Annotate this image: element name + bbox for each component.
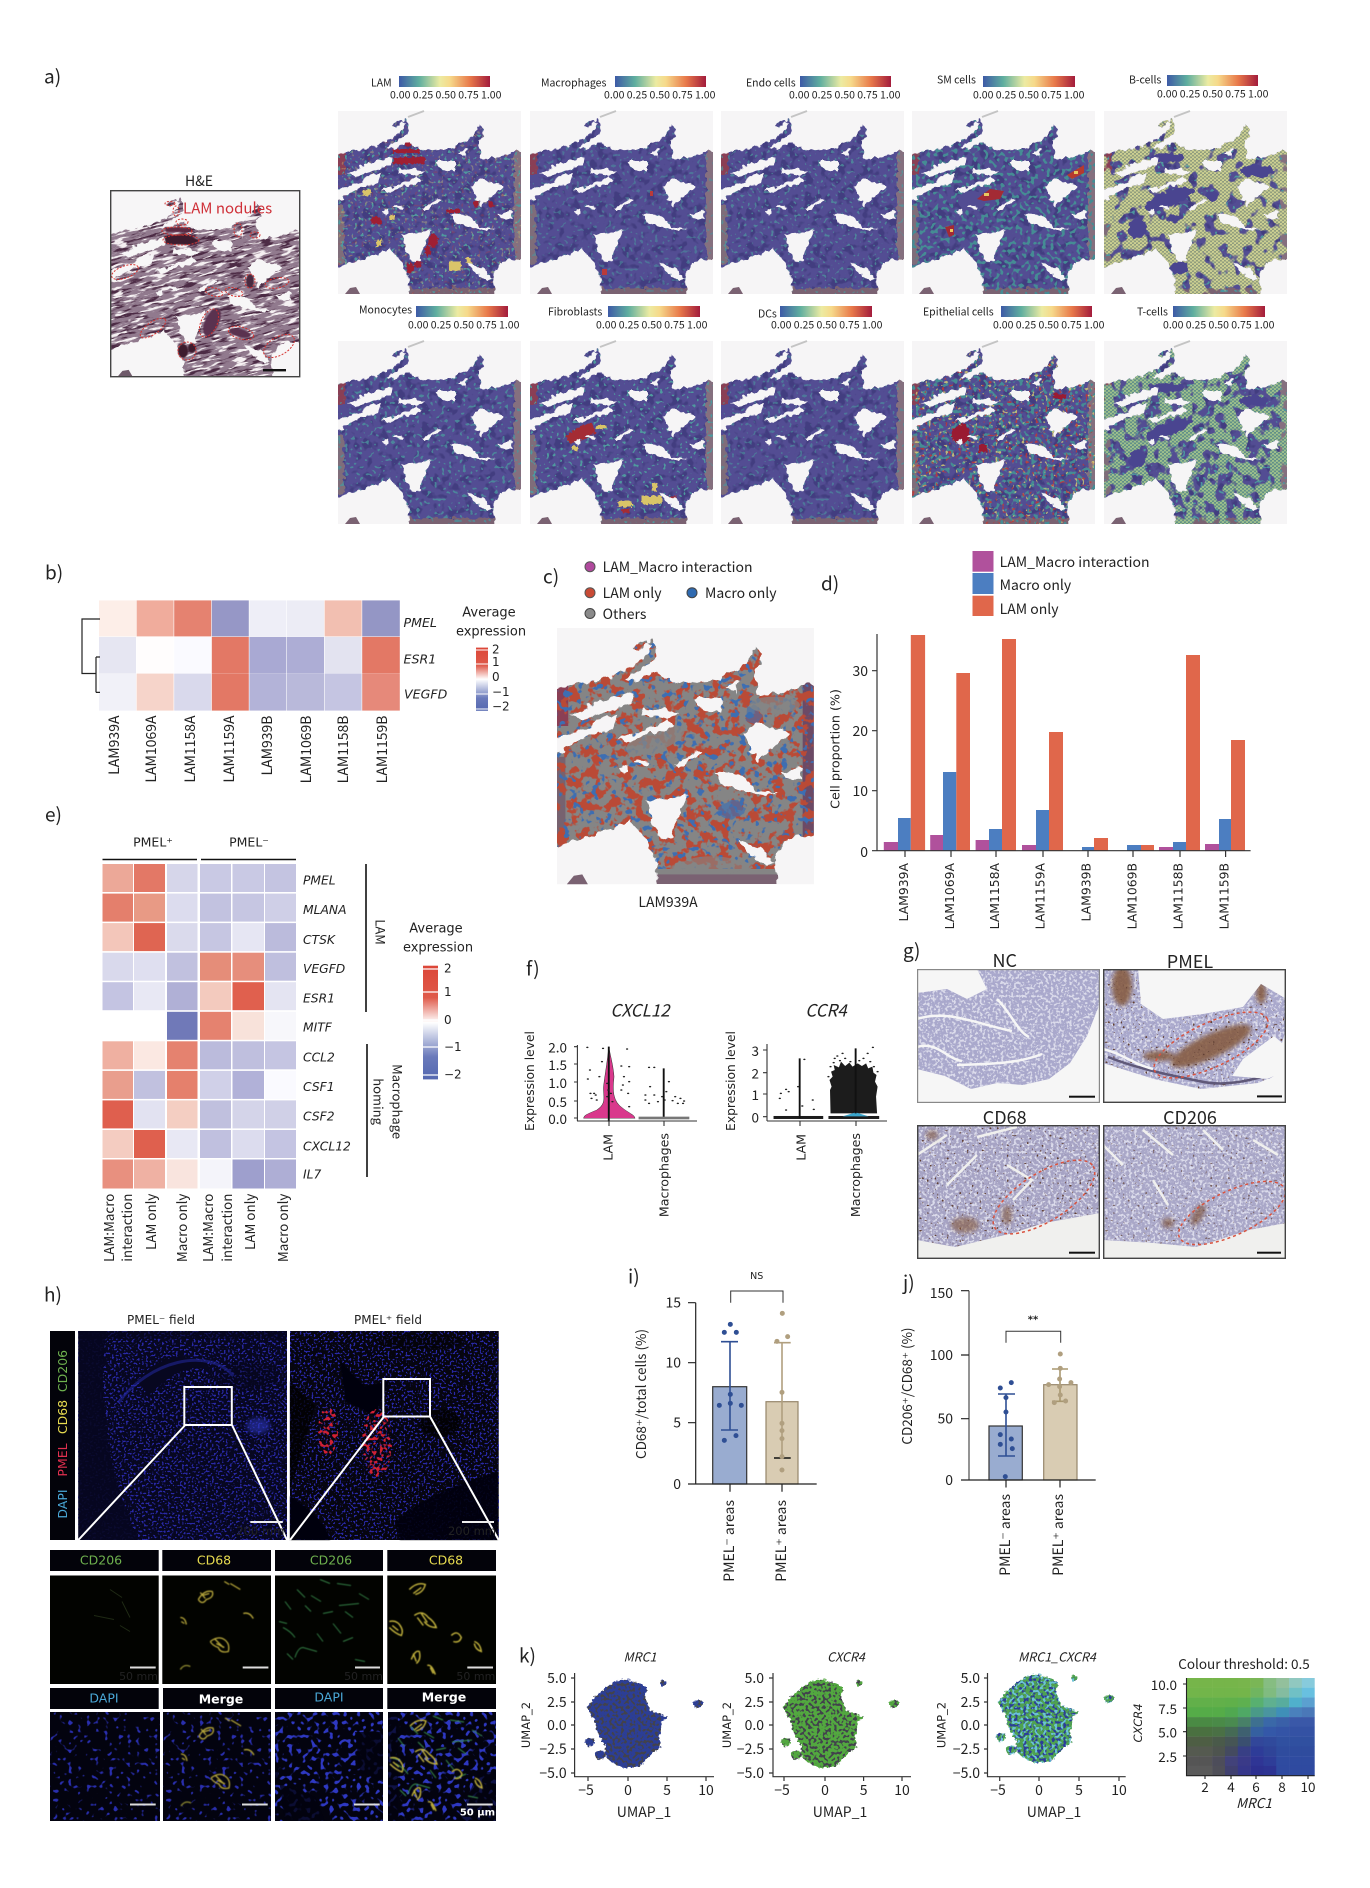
condition labels: Macro only (171, 1194, 191, 1262)
UMAP: MRC1_CXCR4: −2.5 (953, 1739, 980, 1759)
tick labels i: 0 (673, 1474, 681, 1494)
legend: average expression: −1 (492, 685, 510, 699)
panel e: heatmap (45, 800, 473, 1262)
UMAP: MRC1_CXCR4: 2.5 (961, 1692, 980, 1712)
UMAP: MRC1_CXCR4: 5.0 (961, 1668, 980, 1688)
channel key strip: PMEL (55, 1443, 70, 1477)
sample labels: LAM939B (257, 716, 277, 776)
panel d: grouped bar chart (821, 551, 1251, 929)
axis ticks j (961, 1291, 1096, 1488)
gene labels: CTSK (303, 933, 336, 947)
map: SM cells (908, 72, 1100, 298)
colour threshold legend: Colour threshold: 0.5 (1178, 1653, 1310, 1673)
map: B-cells: B-cells (1129, 72, 1161, 88)
map: Endo cells: Endo cells (746, 76, 796, 90)
panel h: immunofluorescence (44, 1280, 499, 1821)
map: LAM: LAM (371, 76, 392, 90)
legend: average expression: −2 (444, 1068, 462, 1082)
sample labels d: LAM1069A (942, 862, 957, 929)
map: Monocytes: Monocytes (359, 302, 412, 318)
row 1 channel headers: CD68 (197, 1552, 231, 1568)
colour threshold legend: 4 (1227, 1776, 1235, 1796)
plot titles: CCR4 (805, 996, 848, 1022)
UMAP: MRC1_CXCR4: UMAP_2 (934, 1702, 948, 1748)
row 2 channel headers: Merge (422, 1690, 466, 1704)
x labels i: PMEL⁺ areas (771, 1500, 791, 1582)
legend: average expression: 2 (492, 642, 500, 656)
plot titles (610, 996, 848, 1022)
axes i (688, 1303, 817, 1492)
UMAP: MRC1: −2.5 (539, 1739, 567, 1759)
gene labels: CSF2 (303, 1110, 335, 1124)
UMAP: MRC1: MRC1 (623, 1646, 657, 1666)
map: B-cells: 0.00 0.25 0.50 0.75 1.00 (1157, 86, 1269, 102)
channel key strip: CD206 (55, 1350, 70, 1392)
y ticks d: 20 (852, 721, 868, 741)
sample labels: LAM1069B (296, 716, 316, 783)
gene labels: ESR1 (404, 652, 436, 666)
violin: CXCL12 (523, 1031, 697, 1217)
UMAP: MRC1: 5.0 (547, 1668, 567, 1688)
significance bracket: ** (1028, 1314, 1039, 1326)
UMAP: MRC1: 0 (624, 1780, 632, 1800)
merge image, PMEL- (163, 1712, 271, 1821)
UMAP: MRC1_CXCR4: UMAP_1 (1027, 1802, 1081, 1822)
UMAP: MRC1 (519, 1646, 714, 1822)
gene group brackets: homing (370, 1078, 388, 1126)
legend: average expression: 1 (492, 655, 500, 669)
panel letter k: k) (519, 1642, 536, 1668)
UMAP: MRC1: 10 (698, 1780, 714, 1800)
map: Monocytes (334, 302, 526, 528)
DAPI image, PMEL+ (275, 1712, 383, 1821)
legend: average expression: −1 (444, 1040, 462, 1054)
gene labels: PMEL (303, 874, 336, 888)
legend: average expression: 0 (444, 1013, 452, 1027)
panel j: bar chart (896, 1268, 1096, 1576)
field titles (127, 1313, 422, 1327)
UMAP: MRC1: 5 (663, 1780, 671, 1800)
significance bracket NS (731, 1271, 783, 1303)
row 1 channel headers (50, 1550, 496, 1571)
IHC: CD68 (917, 1104, 1106, 1259)
bars (884, 635, 1245, 851)
legend c: LAM only (603, 583, 662, 603)
IHC: CD206: CD206 (1163, 1104, 1217, 1130)
map: Epithelial cells: Epithelial cells (923, 304, 994, 320)
tick labels j (930, 1283, 953, 1490)
sample caption: LAM939A (638, 892, 698, 912)
map: DCs (717, 306, 909, 528)
colour threshold legend: 2.5 (1158, 1746, 1177, 1766)
y title j: CD206⁺/CD68⁺ (%) (896, 1327, 916, 1445)
panel i: bar chart (628, 1262, 817, 1582)
gene labels: VEGFD (404, 686, 448, 702)
sample labels: LAM1159A (219, 715, 239, 783)
axes j (968, 1291, 970, 1480)
x labels i (719, 1500, 791, 1582)
channel key strip (50, 1331, 75, 1540)
significance bracket NS: NS (750, 1271, 763, 1282)
tick labels i (665, 1293, 681, 1494)
UMAP: MRC1_CXCR4 (934, 1646, 1127, 1822)
condition labels: Macro only (272, 1194, 292, 1262)
colour threshold legend: 8 (1278, 1776, 1286, 1796)
axes d (872, 634, 1251, 857)
sample labels: LAM1158A (180, 715, 200, 783)
gene labels: VEGFD (303, 962, 345, 976)
y ticks d (852, 661, 868, 862)
map: Fibroblasts: 0.00 0.25 0.50 0.75 1.00 (596, 318, 708, 332)
x labels j: PMEL⁻ areas (995, 1494, 1015, 1576)
map: Endo cells (717, 76, 909, 298)
y axis title d: Cell proportion (%) (828, 689, 842, 809)
UMAP: MRC1_CXCR4: −5 (990, 1780, 1006, 1800)
legend c (585, 557, 777, 624)
legend: average expression: Average (409, 922, 463, 936)
map: Macrophages: Macrophages (541, 76, 606, 90)
tick labels j: 100 (930, 1345, 953, 1365)
bars and dots j (989, 1354, 1077, 1480)
UMAP: MRC1: UMAP_1 (617, 1802, 671, 1822)
UMAP: CXCR4: −5 (774, 1780, 790, 1800)
group headers: PMEL⁻ (229, 834, 269, 850)
x labels j: PMEL⁺ areas (1048, 1494, 1068, 1576)
condition labels: LAM only (140, 1194, 160, 1250)
H&E image with LAM nodules: H&E (185, 171, 213, 191)
legend: average expression: expression (403, 940, 473, 956)
CD68 image, PMEL+: 50 mm (456, 1670, 495, 1683)
gene labels: CSF1 (303, 1080, 335, 1094)
H&E image with LAM nodules: LAM nodules (183, 198, 272, 218)
sample labels d: LAM1158B (1170, 863, 1186, 929)
colour threshold legend: 7.5 (1158, 1698, 1177, 1718)
map: T-cells: T-cells (1137, 304, 1168, 320)
sample labels d: LAM1069B (1124, 863, 1140, 929)
violin: CCR4: Macrophages (848, 1133, 863, 1217)
H&E image with LAM nodules (110, 176, 300, 378)
colour threshold legend: 5.0 (1158, 1722, 1177, 1742)
IHC: PMEL: PMEL (1167, 948, 1213, 974)
UMAP: CXCR4: −2.5 (737, 1739, 764, 1759)
panel letter j: j) (902, 1268, 915, 1296)
map: SM cells: SM cells (937, 72, 976, 88)
gene group brackets: LAM (372, 919, 390, 945)
group headers (102, 834, 296, 860)
IHC: CD68: CD68 (983, 1104, 1027, 1130)
plot titles: CXCL12 (610, 996, 671, 1022)
tick labels j: 50 (937, 1409, 953, 1429)
panel letter c: c) (543, 562, 559, 590)
gene group brackets: Macrophage (388, 1064, 408, 1139)
tick labels j: 0 (945, 1470, 953, 1490)
violin: CCR4: 0 (752, 1107, 759, 1127)
y title i: CD68⁺/total cells (%) (630, 1329, 650, 1459)
tick labels i: 10 (665, 1353, 681, 1373)
colour threshold legend: MRC1 (1236, 1792, 1272, 1812)
legend: average expression: 2 (444, 962, 452, 976)
x labels i: PMEL⁻ areas (719, 1500, 739, 1582)
map: LAM: 0.00 0.25 0.50 0.75 1.00 (390, 88, 502, 102)
sample labels d: LAM939A (896, 862, 911, 921)
condition labels (98, 1194, 292, 1262)
legend: average expression: 0 (492, 670, 500, 684)
map: Fibroblasts (526, 304, 718, 528)
row 2 channel headers (50, 1688, 496, 1709)
CD206 image, PMEL- (50, 1576, 159, 1684)
legend d (972, 551, 1150, 619)
field titles: PMEL⁺ field (354, 1313, 422, 1327)
gene labels: CCL2 (303, 1051, 335, 1065)
row 2 channel headers: DAPI (314, 1690, 344, 1704)
colour threshold legend: 2 (1201, 1776, 1209, 1796)
panel letter a: a) (44, 62, 61, 90)
UMAP: MRC1_CXCR4: MRC1_CXCR4 (1018, 1646, 1097, 1666)
DAPI image, PMEL- (50, 1712, 160, 1821)
UMAP: CXCR4: 5 (860, 1780, 868, 1800)
gene labels: IL7 (303, 1168, 321, 1182)
panel f: violin plots (523, 954, 887, 1217)
UMAP: CXCR4: 10 (894, 1780, 910, 1800)
tick labels j: 150 (930, 1283, 953, 1303)
PMEL- field image (78, 1331, 287, 1540)
map: Epithelial cells: 0.00 0.25 0.50 0.75 1.00 (993, 318, 1105, 332)
channel key strip: DAPI (55, 1489, 70, 1519)
panel letter f: f) (526, 954, 540, 982)
significance bracket (1006, 1314, 1061, 1343)
gene labels: MLANA (303, 903, 346, 917)
gene labels (303, 874, 351, 1182)
UMAP: CXCR4: 0.0 (745, 1715, 764, 1735)
UMAP: MRC1: 2.5 (547, 1692, 567, 1712)
colour threshold legend: CXCR4 (1131, 1703, 1145, 1743)
violin: CCR4: LAM (794, 1134, 808, 1161)
legend d: LAM only (1000, 599, 1059, 619)
gene labels: ESR1 (303, 992, 335, 1006)
legend d: LAM_Macro interaction (1000, 552, 1150, 572)
sample labels (104, 715, 392, 783)
legend: average expression: 1 (444, 985, 452, 999)
CD206 image, PMEL-: 50 mm (119, 1670, 158, 1683)
y ticks d: 0 (860, 842, 868, 862)
map: B-cells (1100, 72, 1292, 298)
panel letter d: d) (821, 570, 839, 596)
panel b: heatmap (45, 558, 526, 783)
group headers: PMEL⁺ (133, 834, 173, 850)
bars and dots i (713, 1313, 798, 1484)
condition labels: LAM:Macro (197, 1194, 217, 1262)
gene group brackets (366, 864, 408, 1177)
sample labels d: LAM1159A (1032, 862, 1048, 929)
gene labels: MITF (303, 1020, 333, 1034)
field titles: PMEL⁻ field (127, 1313, 195, 1327)
panel letter g: g) (903, 936, 920, 964)
condition labels: LAM only (239, 1194, 259, 1250)
map: T-cells (1100, 304, 1292, 528)
IHC: NC (917, 947, 1100, 1103)
violin: CCR4: Expression level (724, 1031, 738, 1131)
row 2 channel headers: Merge (199, 1692, 243, 1706)
violin: CXCL12: 1.5 (548, 1054, 567, 1074)
colour threshold legend: 10 (1300, 1776, 1316, 1796)
sample labels: LAM1159B (372, 716, 392, 783)
CD68 image, PMEL+ (387, 1576, 496, 1684)
panel letter h: h) (44, 1280, 62, 1308)
panel letter i: i) (628, 1262, 640, 1290)
condition labels: interaction (216, 1194, 236, 1262)
legend c: Others (603, 604, 647, 624)
legend: average expression (456, 606, 526, 714)
condition labels: LAM:Macro (98, 1194, 118, 1262)
spatial map image (557, 628, 814, 884)
UMAP: MRC1_CXCR4: 0.0 (961, 1715, 980, 1735)
legend c: Macro only (705, 583, 777, 603)
merge image, PMEL+ (388, 1712, 496, 1821)
UMAP: CXCR4: CXCR4 (827, 1646, 866, 1666)
heatmap cells (99, 600, 400, 711)
dendrogram (82, 619, 100, 692)
y ticks d: 10 (852, 781, 868, 801)
merge image, PMEL+: 50 μm (460, 1808, 495, 1818)
panel c: spatial map LAM939A (543, 557, 814, 912)
map: SM cells: 0.00 0.25 0.50 0.75 1.00 (973, 88, 1085, 102)
UMAP: MRC1: −5 (578, 1780, 594, 1800)
UMAP: MRC1: −5.0 (539, 1763, 567, 1783)
sample labels: LAM1158B (333, 716, 353, 783)
colour threshold legend (1131, 1653, 1316, 1812)
tick labels i: 15 (665, 1293, 681, 1313)
colour threshold legend: 6 (1252, 1776, 1260, 1796)
violin: CXCL12: 0.5 (548, 1091, 567, 1111)
sample labels: LAM1069A (141, 715, 161, 783)
PMEL+ field image (290, 1331, 499, 1540)
UMAP: MRC1_CXCR4: 10 (1111, 1780, 1127, 1800)
violin: CCR4: 2 (752, 1063, 759, 1083)
map: LAM (334, 76, 526, 298)
PMEL- field image: 200 mm (236, 1524, 284, 1538)
sample labels d: LAM1159B (1216, 863, 1232, 929)
IHC: PMEL (1103, 948, 1286, 1103)
gene labels: PMEL (404, 615, 437, 630)
UMAP: MRC1: 0.0 (547, 1715, 567, 1735)
map: DCs: DCs (758, 306, 777, 322)
UMAP: CXCR4: 2.5 (745, 1692, 764, 1712)
panel letter b: b) (45, 558, 63, 586)
channel key strip: CD68 (55, 1400, 70, 1434)
UMAP: CXCR4: UMAP_2 (720, 1702, 734, 1748)
legend: average expression (403, 922, 473, 1082)
violin: CXCL12: Macrophages (656, 1133, 672, 1217)
violin: CXCL12: Expression level (523, 1031, 537, 1131)
violin: CXCL12: 0.0 (548, 1108, 567, 1128)
UMAP: MRC1_CXCR4: 0 (1035, 1780, 1043, 1800)
UMAP: CXCR4: UMAP_1 (813, 1802, 867, 1822)
heatmap cells (102, 864, 296, 1188)
PMEL+ field image: 200 mm (448, 1524, 496, 1538)
map: Macrophages (526, 76, 718, 298)
panel k: UMAPs (519, 1642, 1316, 1822)
legend: average expression: Average (462, 606, 516, 620)
panel g: IHC images (903, 936, 1294, 1259)
sample labels d: LAM939B (1078, 863, 1094, 922)
condition labels: interaction (116, 1194, 136, 1262)
map: Fibroblasts: Fibroblasts (548, 304, 602, 320)
panel a: spatial maps (40, 62, 1292, 528)
CD206 image, PMEL+ (275, 1576, 383, 1684)
violin: CXCL12: 1.0 (548, 1072, 567, 1092)
map: Monocytes: 0.00 0.25 0.50 0.75 1.00 (408, 318, 520, 332)
panel letter e: e) (45, 800, 62, 828)
map: Endo cells: 0.00 0.25 0.50 0.75 1.00 (789, 88, 901, 102)
legend: average expression: expression (456, 624, 526, 640)
violin: CCR4 (724, 1031, 887, 1217)
row 2 channel headers: DAPI (89, 1690, 119, 1706)
IHC: NC: NC (992, 947, 1017, 973)
UMAP: MRC1: UMAP_2 (519, 1702, 533, 1748)
sample labels: LAM939A (104, 715, 124, 775)
CD206 image, PMEL+: 50 mm (344, 1670, 383, 1683)
colour threshold legend: 10.0 (1151, 1674, 1177, 1694)
gene labels: CXCL12 (303, 1139, 351, 1153)
violin: CXCL12: LAM (600, 1134, 616, 1161)
legend c: LAM_Macro interaction (603, 557, 753, 577)
UMAP: MRC1_CXCR4: 5 (1075, 1780, 1083, 1800)
sample labels d (896, 862, 1232, 929)
map: Epithelial cells (908, 304, 1105, 528)
x labels j (995, 1494, 1068, 1576)
row 1 channel headers: CD206 (310, 1552, 352, 1568)
violin: CXCL12: 2.0 (548, 1037, 567, 1057)
UMAP: CXCR4 (720, 1646, 911, 1822)
violin: CCR4: 3 (752, 1040, 759, 1060)
CD68 image, PMEL- (162, 1576, 271, 1684)
map: DCs: 0.00 0.25 0.50 0.75 1.00 (771, 318, 883, 332)
IHC: CD206 (1103, 1104, 1294, 1259)
y ticks d: 30 (852, 661, 868, 681)
UMAP: CXCR4: 5.0 (745, 1668, 764, 1688)
tick labels i: 5 (673, 1413, 681, 1433)
row 1 channel headers: CD68 (429, 1552, 463, 1568)
sample labels d: LAM1158A (987, 862, 1002, 929)
gene labels (404, 615, 448, 702)
UMAP: MRC1_CXCR4: −5.0 (953, 1763, 980, 1783)
map: T-cells: 0.00 0.25 0.50 0.75 1.00 (1163, 318, 1275, 332)
row 1 channel headers: CD206 (80, 1552, 122, 1568)
map: Macrophages: 0.00 0.25 0.50 0.75 1.00 (604, 88, 716, 102)
violin: CCR4: 1 (752, 1084, 759, 1104)
UMAP: CXCR4: −5.0 (737, 1763, 764, 1783)
UMAP: CXCR4: 0 (821, 1780, 829, 1800)
legend d: Macro only (1000, 575, 1072, 595)
legend: average expression: −2 (492, 700, 510, 714)
